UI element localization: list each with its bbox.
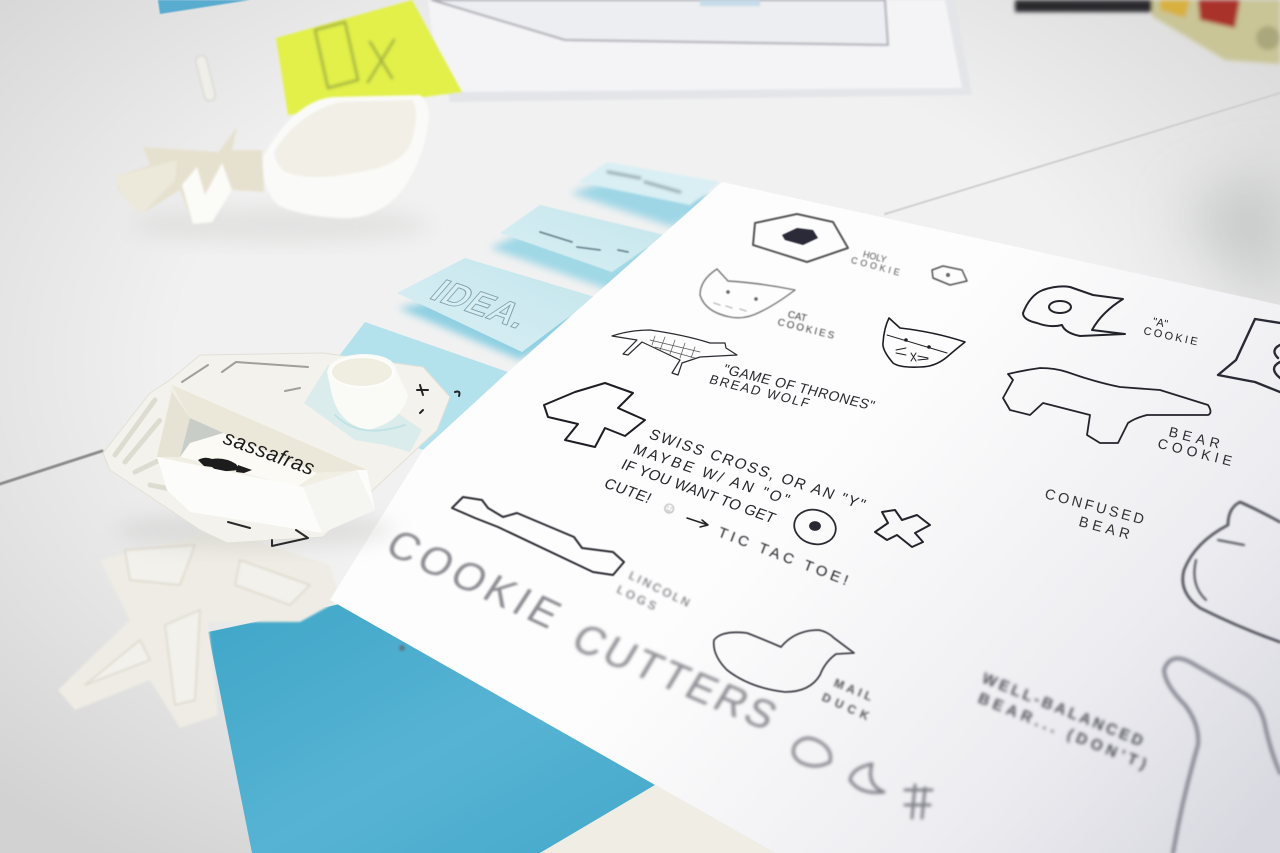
sketch: hex cookie [753, 214, 967, 285]
sketch: game of thrones wolf [612, 330, 737, 375]
cut out windows [182, 362, 308, 391]
sketch: target circle [790, 505, 840, 549]
note glyphs [417, 385, 460, 413]
mesh texture [115, 400, 175, 490]
sketch: bear cookie [1003, 368, 1210, 443]
paper stack at top [428, 0, 972, 102]
label: a cookie: COOKIE [1142, 325, 1199, 348]
mesh backing [103, 353, 450, 543]
label: cat cookies: COOKIES [776, 317, 836, 342]
note: swiss cross text: TIC TAC TOE! [716, 524, 850, 589]
window in tray [180, 418, 313, 487]
heading: cookie cutters [378, 521, 785, 738]
label: confused bear [1038, 486, 1146, 546]
box top right [1015, 0, 1280, 64]
note: swiss cross text: ☺ [659, 498, 680, 519]
sketch: cat cookie [700, 269, 795, 318]
label: confused bear: BEAR [1077, 514, 1131, 543]
cream desk strip [540, 785, 775, 853]
sketch: bear right bottom [1164, 658, 1280, 853]
sketch: cat face two [883, 318, 965, 367]
sketch: duck [714, 630, 854, 692]
note: swiss cross text: IF YOU WANT TO GET [618, 456, 778, 527]
heading: cookie cutters: COOKIE [378, 521, 569, 637]
label: game of thrones: BREAD WOLF [707, 372, 812, 410]
label: duck: DUCK [820, 690, 871, 723]
note: swiss cross text: CUTE! [601, 475, 654, 507]
note: IDEA: IDEA. [423, 274, 540, 335]
label: duck [820, 676, 874, 723]
label: a cookie: "A" [1152, 316, 1169, 331]
cup [327, 354, 408, 430]
blue paper bottom [208, 604, 655, 853]
label: hex cookie [850, 246, 903, 278]
small peg [195, 54, 216, 102]
label: game of thrones: "GAME OF THRONES" [721, 361, 877, 413]
label: lincoln logs: LOGS [615, 584, 658, 613]
note: swiss cross text: MAYBE W/ AN "O" [630, 441, 792, 508]
cookie cutter top left [115, 95, 430, 243]
cup rim shadow [335, 415, 405, 431]
heading: cookie cutters: CUTTERS [564, 615, 785, 738]
note: fourth [303, 322, 508, 450]
label: lincoln logs: LINCOLN [627, 570, 691, 610]
sticky notes behind the sheet [303, 162, 722, 450]
label: hex cookie: COOKIE [850, 255, 901, 278]
star cutter [115, 127, 264, 224]
label: bear cookie: BEAR [1167, 423, 1222, 451]
label: hex cookie: HOLY [862, 249, 888, 265]
label: bear cookie [1156, 421, 1237, 469]
sketch: small x [875, 510, 930, 547]
label: cat cookies [776, 307, 838, 342]
cutter shadow [115, 512, 395, 548]
translucent cutter print bottom left [58, 530, 340, 728]
label: confused bear: CONFUSED [1043, 486, 1146, 528]
paper sheet [330, 182, 1280, 853]
small doodles after heading [793, 738, 932, 818]
label: cat cookies: CAT [786, 309, 808, 325]
sketch: bear right top [1183, 502, 1280, 642]
sketch: letter a cookie [1023, 286, 1125, 336]
yellow sticky note [276, 0, 462, 115]
icon: cut out ticket [228, 522, 308, 546]
tray cutter [157, 385, 375, 533]
note: second [490, 205, 665, 292]
note: IDEA [397, 258, 600, 360]
tray front wall [157, 457, 375, 533]
label: sassafras: sassafras [220, 426, 318, 480]
label: well balanced bear: WELL-BALANCED [980, 670, 1145, 750]
blue scrap top left [158, 0, 250, 14]
label: well balanced bear: BEAR... (DON'T) [976, 690, 1149, 773]
oval cutter [263, 95, 429, 218]
cup and tray cutter group [103, 353, 460, 548]
icon: black animal [198, 458, 252, 473]
mark on blue paper [399, 645, 405, 651]
note: swiss cross text: SWISS CROSS, OR AN "Y" [646, 426, 868, 513]
note: top [570, 162, 722, 227]
arrow to tic tac toe [687, 518, 708, 527]
note: swiss cross text [601, 426, 868, 589]
label: a cookie [1142, 314, 1201, 348]
sketch: letter b cookie [1218, 319, 1280, 392]
label: duck: MAIL [832, 676, 874, 704]
label: bear cookie: COOKIE [1156, 435, 1234, 469]
sketch: swiss cross [544, 383, 645, 447]
sketch: lincoln logs [452, 497, 624, 575]
